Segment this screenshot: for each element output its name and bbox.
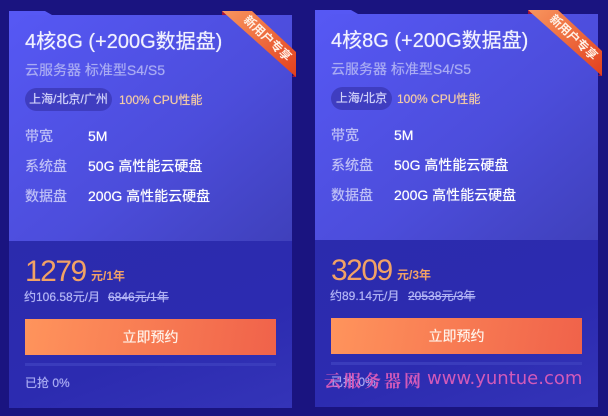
new user ribbon: 新用户专享 — [547, 11, 601, 63]
original price: 6846元/1年 — [108, 290, 169, 304]
monthly price: 约89.14元/月 — [330, 289, 399, 303]
card corner tab — [9, 11, 54, 15]
price unit: 元/3年 — [397, 268, 431, 282]
system disk label: 系统盘 — [331, 157, 373, 173]
new user ribbon — [222, 11, 296, 77]
region badge: 上海/北京/广州 — [29, 92, 108, 106]
system disk value: 50G 高性能云硬盘 — [394, 157, 508, 173]
reserve button — [25, 319, 276, 355]
panel section: specifications — [9, 15, 292, 241]
new user ribbon — [528, 10, 602, 76]
panel section: specifications — [315, 14, 598, 240]
data disk label: 数据盘 — [331, 187, 373, 203]
reserve button — [331, 318, 582, 354]
progress bar — [25, 363, 276, 366]
data disk label: 数据盘 — [25, 188, 67, 204]
data disk value: 200G 高性能云硬盘 — [394, 187, 516, 203]
panel section: pricing — [315, 240, 598, 407]
plan subtitle: 云服务器 标准型S4/S5 — [331, 61, 471, 77]
CPU performance note: 100% CPU性能 — [119, 93, 202, 107]
text: www.yuntue.com — [427, 368, 582, 389]
original price: 20538元/3年 — [408, 289, 475, 303]
bandwidth label: 带宽 — [331, 127, 359, 143]
price: 3209 — [331, 254, 392, 287]
bandwidth value: 5M — [394, 127, 413, 143]
system disk value: 50G 高性能云硬盘 — [88, 158, 202, 174]
plan title: 4核8G (+200G数据盘) — [331, 30, 528, 52]
panel section: pricing — [9, 241, 292, 408]
new user ribbon: 新用户专享 — [241, 12, 295, 64]
CPU performance note: 100% CPU性能 — [397, 92, 480, 106]
system disk label: 系统盘 — [25, 158, 67, 174]
plan subtitle: 云服务器 标准型S4/S5 — [25, 62, 165, 78]
panel: 3-year plan — [315, 10, 602, 407]
sold percentage: 已抢 0% — [331, 375, 376, 389]
bandwidth label: 带宽 — [25, 128, 53, 144]
reserve button: 立即预约 — [428, 328, 484, 344]
watermark — [324, 367, 582, 392]
reserve button: 立即预约 — [122, 329, 178, 345]
panel: 1-year plan — [9, 11, 296, 408]
price: 1279 — [25, 255, 86, 288]
region badge: 上海/北京 — [336, 91, 387, 105]
card corner tab — [315, 10, 360, 14]
progress bar — [331, 362, 582, 365]
text: 云服务器网 — [324, 367, 424, 392]
sold percentage: 已抢 0% — [25, 376, 70, 390]
plan title: 4核8G (+200G数据盘) — [25, 31, 222, 53]
data disk value: 200G 高性能云硬盘 — [88, 188, 210, 204]
bandwidth value: 5M — [88, 128, 107, 144]
price unit: 元/1年 — [91, 269, 125, 283]
monthly price: 约106.58元/月 — [24, 290, 100, 304]
region badge — [25, 88, 112, 111]
region badge — [331, 87, 392, 110]
